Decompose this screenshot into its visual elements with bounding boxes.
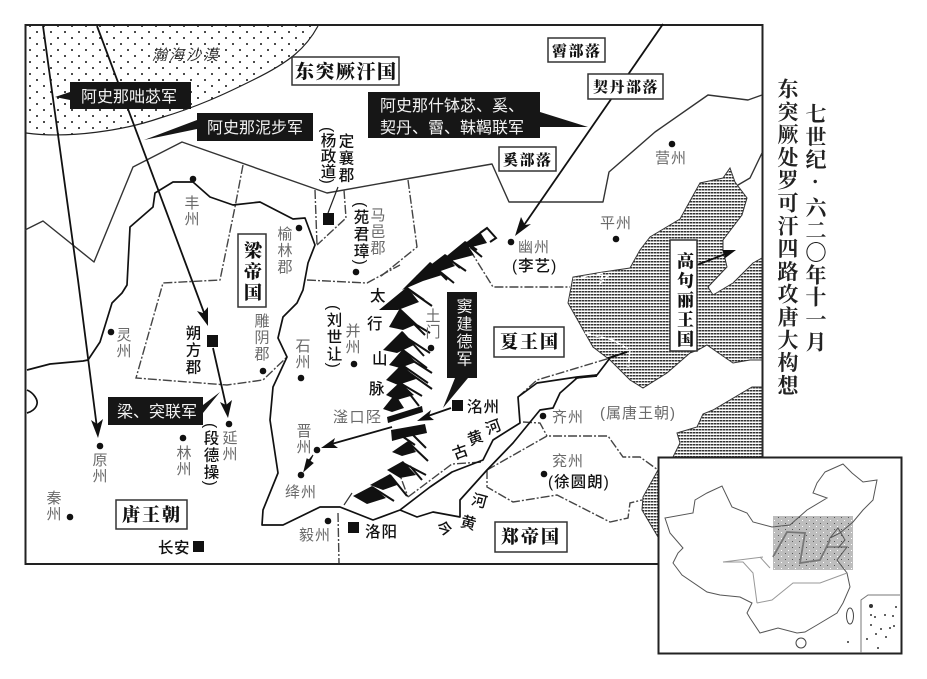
arrow: Ashina Duobi to Yuanzhou (43, 26, 103, 438)
city: Jiangzhou (285, 472, 317, 501)
state: Zheng Empire: 郑帝国 (501, 526, 561, 547)
road to Luoyang (344, 493, 352, 505)
city: Yulin commandery (276, 225, 302, 276)
sea: Bohai hatch (568, 168, 762, 388)
city: Linzhou: 林州 (174, 445, 192, 477)
title: date (803, 103, 827, 353)
mountain label: Taihang (367, 287, 388, 398)
label: Ashina Shibobi coalition: 阿史那什钵苾、奚、 (380, 97, 524, 115)
map frame (26, 25, 762, 564)
city: Chang'an (158, 539, 204, 557)
river label: old Yellow River: 古 (450, 441, 471, 463)
city: Qinzhou: 秦州 (44, 490, 62, 522)
river label: old Yellow River (450, 416, 504, 463)
title: main: 东突厥处罗可汗四路攻唐大构想 (775, 78, 799, 397)
city: Mayi commandery: 马邑郡 (368, 207, 386, 256)
northern frontier (25, 95, 762, 262)
arrow: Jinzhou to Jiangzhou (304, 455, 313, 471)
city: Mayi commandery: (苑君璋) (352, 202, 369, 266)
city: Bingzhou: 并州 (344, 323, 360, 355)
Yellow River in inset (773, 532, 830, 563)
Huanghe mouth (575, 352, 627, 378)
mountain label: Taihang: 行 (367, 315, 383, 333)
city: Mingzhou (452, 398, 500, 416)
city: Qinzhou (44, 490, 73, 522)
city: Dingxiang commandery: (杨政道) (318, 127, 336, 184)
label: Dou Jiande army (443, 292, 477, 408)
river label: old Yellow River: 河 (483, 416, 504, 438)
mountain label: Taihang: 脉 (369, 380, 385, 398)
city: Shuofang commandery: 朔方郡 (184, 325, 201, 376)
label: Ashina Nibu army: 阿史那泥步军 (207, 119, 303, 137)
state: Goguryeo (670, 240, 697, 351)
South China Sea islands (847, 604, 897, 649)
city: Tumen: 土门 (424, 308, 440, 340)
Present Yellow River (400, 375, 597, 517)
general: Liu Shirang: (刘世让) (324, 305, 342, 369)
label: Dou Jiande army: 窦建德军 (454, 298, 472, 368)
label: Ashina Duobi army: 阿史那咄苾军 (81, 88, 177, 106)
label: Liang-Turk army: 梁、突联军 (117, 403, 197, 421)
city: Yulin commandery: 榆林郡 (276, 226, 292, 276)
Hainan (796, 638, 806, 648)
desert: Hanhai (26, 26, 318, 135)
city: Lingzhou: 灵州 (114, 327, 132, 359)
city: Yizhou (299, 518, 331, 544)
city: Shizhou: 石州 (294, 338, 310, 370)
city: Mayi commandery (352, 202, 386, 275)
tribe: Khitan (588, 74, 663, 99)
tribe: Xi (奚) (499, 147, 556, 171)
city: Yanzhou (Shandong): (徐圆朗) (548, 473, 610, 491)
mountain label: Taihang: 山 (372, 350, 388, 368)
state: Xia (494, 327, 564, 357)
label: Ashina Duobi army (55, 82, 191, 109)
city: Jinzhou (294, 423, 320, 455)
South China Sea box (861, 595, 900, 653)
line to Dingxiang (328, 187, 338, 213)
river label: present Yellow River: 黄 (458, 512, 478, 534)
coast in region (830, 528, 845, 548)
city: Luoyang: 洛阳 (365, 523, 398, 541)
inset map of China (658, 458, 902, 654)
western river bend (27, 390, 37, 413)
city: Mingzhou: 洺州 (467, 398, 500, 416)
title: date: 七世纪 (803, 103, 827, 171)
city: Yingzhou (655, 141, 687, 167)
city: Chang'an: 长安 (158, 539, 190, 557)
city: Youzhou: 幽州 (518, 239, 550, 256)
state: Tang (116, 500, 187, 529)
title: date: · (803, 178, 827, 185)
highlighted region (773, 516, 853, 570)
mountain label: Taihang: 太 (370, 287, 386, 305)
Yangtze (723, 557, 847, 603)
eastern frontier (738, 153, 762, 185)
city: Yanzhou (Shandong): 兖州 (552, 453, 584, 470)
city: Shuofang commandery (184, 325, 218, 376)
river label: present Yellow River: 河 (469, 490, 489, 512)
state: Xia: 夏王国 (500, 331, 560, 352)
river label: old Yellow River: 黄 (465, 427, 486, 449)
river label: present Yellow River (434, 490, 489, 540)
state: Goguryeo: 高句丽王国 (674, 251, 694, 350)
China outline (665, 464, 877, 633)
arrow: Ashina Nibu to Shuofang (97, 26, 208, 326)
note: subject to Tang: (属唐王朝) (600, 405, 676, 422)
city: Yanzhou (Shandong) (541, 453, 610, 491)
city: Pingzhou (600, 215, 632, 242)
label: Ashina Nibu army (144, 113, 313, 141)
tribe: Khitan: 契丹部落 (593, 78, 659, 96)
arrow: Dou Jiande via Fukou pass (321, 408, 451, 448)
state: Liang Empire: 梁帝国 (242, 240, 262, 304)
city: Jinzhou: 晋州 (294, 423, 312, 455)
city: Yuanzhou: 原州 (90, 452, 108, 484)
tribe: Xi (霫): 霫部落 (552, 42, 602, 60)
city: Qizhou: 齐州 (552, 409, 584, 426)
city: Yizhou: 毅州 (299, 527, 331, 544)
label: Liang-Turk army (108, 392, 220, 425)
city: Youzhou: (李艺) (512, 257, 557, 275)
Taiwan (846, 608, 854, 624)
tribe: Xi (奚): 奚部落 (503, 151, 553, 169)
label: Ashina Shibobi coalition (368, 92, 588, 138)
Old Yellow River (400, 352, 627, 510)
city: Fengzhou: 丰州 (182, 195, 200, 227)
label: Ashina Shibobi coalition: 契丹、霫、靺鞨联军 (380, 119, 524, 137)
city: Pingzhou: 平州 (600, 215, 632, 232)
general: Duan Decao: (段德操) (202, 423, 219, 487)
pass: Fukou: 滏口陉 (333, 409, 383, 426)
city: Yanzhou: 延州 (220, 430, 238, 462)
Yellow River (27, 182, 400, 525)
tribe: Xi (霫) (548, 38, 605, 62)
state: Eastern Turkic Khaganate: 东突厥汗国 (295, 60, 398, 83)
city: Dingxiang commandery: 定襄郡 (336, 132, 354, 184)
sea: Yellow Sea hatch (642, 387, 762, 537)
state: Zheng Empire (495, 522, 567, 552)
Dynasty boundaries (136, 165, 658, 563)
city: Diaoyin commandery: 雕阴郡 (252, 313, 270, 362)
city: Youzhou (508, 239, 557, 275)
arrow: Goguryeo (697, 250, 736, 265)
highlighted region stipple (773, 516, 853, 570)
city: Yingzhou: 营州 (655, 150, 687, 167)
city: Luoyang (348, 522, 398, 541)
city: Fengzhou (182, 176, 200, 227)
state: Tang: 唐王朝 (122, 504, 182, 525)
state: Liang Empire (238, 234, 266, 307)
city: Dingxiang commandery (318, 127, 354, 225)
river label: present Yellow River: 今 (434, 518, 455, 540)
Taihang mountains (353, 228, 496, 504)
title: date: 六二〇年十一月 (803, 197, 827, 353)
arrow: Ashina Shibobi to Youzhou (515, 24, 663, 236)
city: Jiangzhou: 绛州 (285, 484, 317, 501)
desert label: 瀚海沙漠 (152, 47, 221, 64)
arrow: Shuofang to Yanzhou (213, 348, 232, 418)
